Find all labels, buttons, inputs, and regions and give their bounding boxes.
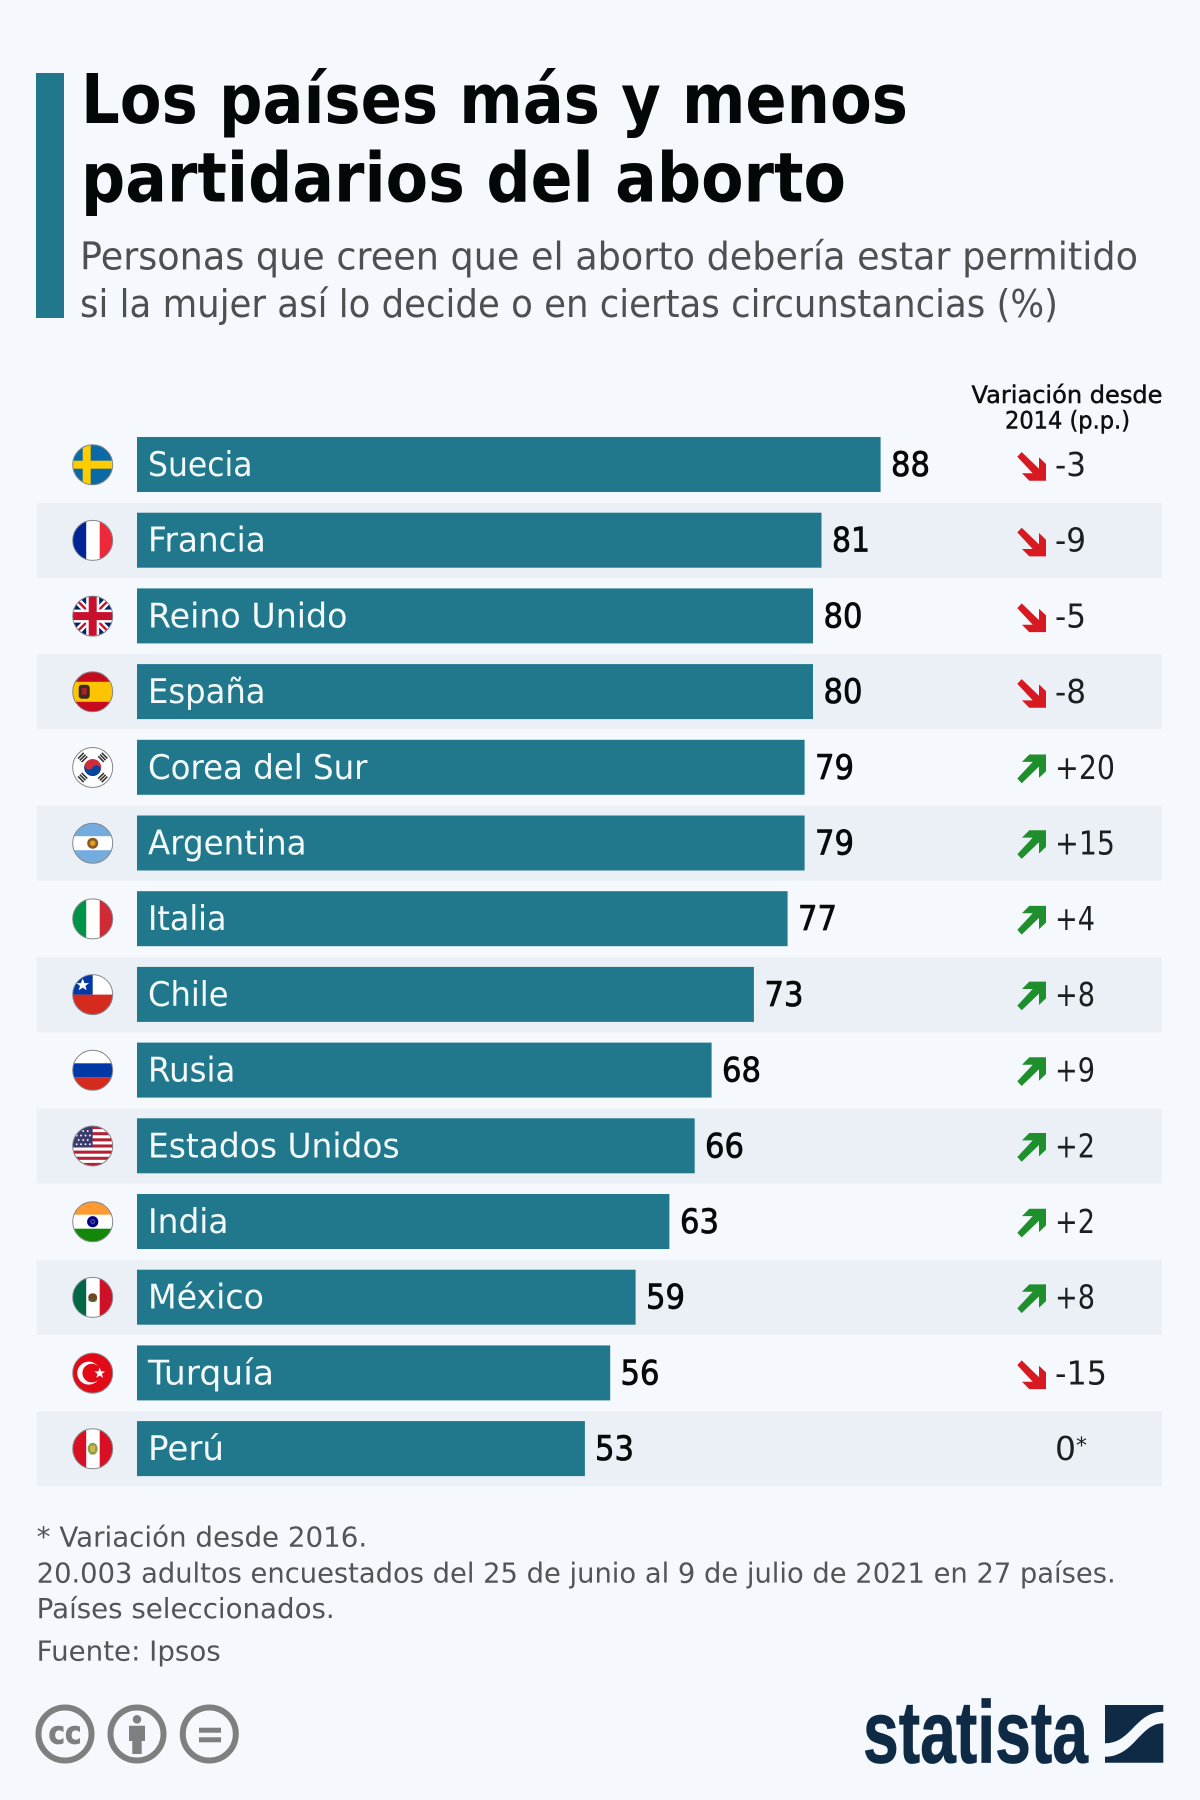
flag: España bbox=[73, 672, 113, 712]
row: Rusia bbox=[73, 1043, 1095, 1098]
arrow: up bbox=[1017, 906, 1046, 935]
flag: India bbox=[73, 1202, 113, 1242]
arrow: down bbox=[1017, 528, 1046, 556]
value: España: 80 bbox=[824, 672, 862, 711]
row: España bbox=[37, 654, 1162, 729]
icon: creative commons: cc bbox=[48, 1716, 82, 1752]
footnotes: * Variación desde 2016. bbox=[37, 1522, 367, 1554]
row: México bbox=[37, 1260, 1162, 1335]
flag: México bbox=[73, 1277, 113, 1317]
arrow: down bbox=[1017, 603, 1046, 632]
flag: Corea del Sur bbox=[73, 748, 113, 788]
label: Rusia: Rusia bbox=[148, 1051, 235, 1091]
change: Corea del Sur: +20 bbox=[1055, 748, 1115, 787]
bar: Argentina bbox=[137, 816, 805, 870]
title bbox=[81, 60, 908, 218]
value: Argentina: 79 bbox=[815, 824, 854, 862]
arrow: down bbox=[1017, 452, 1046, 481]
arrow: down bbox=[1017, 679, 1046, 708]
value: Italia: 77 bbox=[798, 899, 837, 938]
icon: creative commons bbox=[38, 1708, 92, 1760]
row: Italia bbox=[73, 891, 1095, 946]
value: México: 59 bbox=[646, 1278, 685, 1317]
value: Reino Unido: 80 bbox=[824, 596, 862, 635]
column header: variation: 2014 (p.p.) bbox=[1005, 406, 1130, 434]
label: Turquía: Turquía bbox=[147, 1353, 274, 1393]
change: Turquía: -15 bbox=[1055, 1353, 1107, 1392]
arrow: down bbox=[1017, 1360, 1046, 1389]
accent bar bbox=[36, 73, 64, 318]
arrow: up bbox=[1017, 1133, 1046, 1162]
label: Estados Unidos: Estados Unidos bbox=[148, 1126, 400, 1166]
change: Rusia: +9 bbox=[1055, 1051, 1095, 1090]
change: Francia: -9 bbox=[1055, 521, 1086, 560]
arrow: up bbox=[1017, 982, 1046, 1010]
row: Turquía bbox=[73, 1345, 1107, 1400]
row: Suecia bbox=[73, 437, 1086, 492]
value: Corea del Sur: 79 bbox=[815, 748, 854, 787]
change: Reino Unido: -5 bbox=[1055, 596, 1086, 635]
icon: attribution bbox=[110, 1708, 164, 1760]
row: India bbox=[73, 1194, 1095, 1249]
column header: variation: Variación desde bbox=[972, 381, 1162, 409]
row: Estados Unidos bbox=[37, 1109, 1162, 1184]
label: Francia: Francia bbox=[148, 521, 266, 561]
bar: Chile bbox=[137, 967, 754, 1022]
value: Suecia: 88 bbox=[891, 445, 930, 484]
flag: Argentina bbox=[73, 823, 113, 863]
footnotes: 20.003 adultos encuestados del 25 de junio al 9 de julio de 2021 en 27 países. bbox=[37, 1558, 1116, 1590]
change: Suecia: -3 bbox=[1055, 445, 1086, 484]
row: Francia bbox=[37, 503, 1162, 578]
value: India: 63 bbox=[680, 1202, 719, 1241]
label: Chile: Chile bbox=[148, 975, 228, 1015]
arrow: up bbox=[1017, 1057, 1046, 1086]
arrow: up bbox=[1017, 830, 1046, 859]
row: Reino Unido bbox=[73, 588, 1086, 643]
logo: statista: statista bbox=[863, 1682, 1089, 1782]
label: Reino Unido: Reino Unido bbox=[148, 596, 348, 636]
subtitle: Personas que creen que el aborto debería estar permitido bbox=[80, 234, 1138, 278]
change: India: +2 bbox=[1055, 1202, 1095, 1241]
value: Rusia: 68 bbox=[722, 1051, 761, 1090]
row: Perú bbox=[37, 1411, 1162, 1486]
value: Francia: 81 bbox=[832, 521, 870, 560]
flag: Suecia bbox=[73, 445, 113, 485]
flag: Turquía bbox=[73, 1353, 113, 1393]
row: Chile bbox=[37, 957, 1162, 1032]
change: Perú: * bbox=[1076, 1434, 1087, 1459]
flag: Perú bbox=[73, 1429, 113, 1469]
arrow: up bbox=[1017, 1284, 1046, 1313]
footnotes bbox=[37, 1522, 1116, 1668]
footnotes: Países seleccionados. bbox=[37, 1593, 335, 1625]
icon: no derivatives bbox=[183, 1708, 236, 1760]
bar: Rusia bbox=[137, 1043, 712, 1098]
bar: Perú bbox=[137, 1421, 585, 1476]
label: Argentina: Argentina bbox=[148, 824, 307, 864]
bar: Reino Unido bbox=[137, 588, 813, 643]
label: Italia: Italia bbox=[148, 899, 226, 939]
flag: Rusia bbox=[73, 1050, 113, 1090]
bar: Turquía bbox=[137, 1345, 610, 1400]
row: Argentina bbox=[37, 806, 1162, 881]
flag: Italia bbox=[73, 899, 113, 939]
change: Estados Unidos: +2 bbox=[1055, 1126, 1095, 1165]
flag: Francia bbox=[73, 520, 113, 560]
title: Los países más y menos bbox=[81, 60, 908, 140]
label: India: India bbox=[148, 1202, 228, 1242]
footnotes: Fuente: Ipsos bbox=[37, 1636, 221, 1668]
flag: Chile bbox=[73, 975, 113, 1015]
row: Corea del Sur bbox=[73, 740, 1115, 795]
arrow: up bbox=[1017, 754, 1046, 783]
flag: Estados Unidos bbox=[73, 1126, 113, 1166]
label: Corea del Sur: Corea del Sur bbox=[148, 748, 368, 788]
bar: Suecia bbox=[137, 437, 881, 492]
subtitle: si la mujer así lo decide o en ciertas circunstancias (%) bbox=[80, 282, 1058, 326]
flag: Reino Unido bbox=[73, 596, 113, 636]
arrow: up bbox=[1017, 1209, 1046, 1237]
change: Italia: +4 bbox=[1055, 899, 1095, 938]
value: Turquía: 56 bbox=[620, 1353, 660, 1392]
change: Chile: +8 bbox=[1055, 975, 1095, 1014]
value: Chile: 73 bbox=[764, 975, 804, 1014]
change: España: -8 bbox=[1055, 672, 1086, 711]
bar: Francia bbox=[137, 513, 822, 568]
bar: España bbox=[137, 664, 813, 719]
title: partidarios del aborto bbox=[81, 138, 846, 218]
value: Perú: 53 bbox=[595, 1429, 634, 1468]
bar: Italia bbox=[137, 891, 788, 946]
bar: Corea del Sur bbox=[137, 740, 805, 795]
label: México: México bbox=[148, 1278, 264, 1318]
label: Perú: Perú bbox=[148, 1429, 224, 1469]
change: Argentina: +15 bbox=[1055, 824, 1115, 862]
label: España: España bbox=[148, 672, 266, 712]
bar: India bbox=[137, 1194, 669, 1249]
label: Suecia: Suecia bbox=[148, 445, 252, 485]
value: Estados Unidos: 66 bbox=[705, 1126, 744, 1165]
subtitle bbox=[80, 234, 1138, 326]
bar: México bbox=[137, 1270, 636, 1325]
column header: variation bbox=[972, 381, 1162, 434]
change: Perú: 0 bbox=[1055, 1429, 1076, 1468]
bar: Estados Unidos bbox=[137, 1118, 695, 1173]
change: México: +8 bbox=[1055, 1278, 1095, 1317]
